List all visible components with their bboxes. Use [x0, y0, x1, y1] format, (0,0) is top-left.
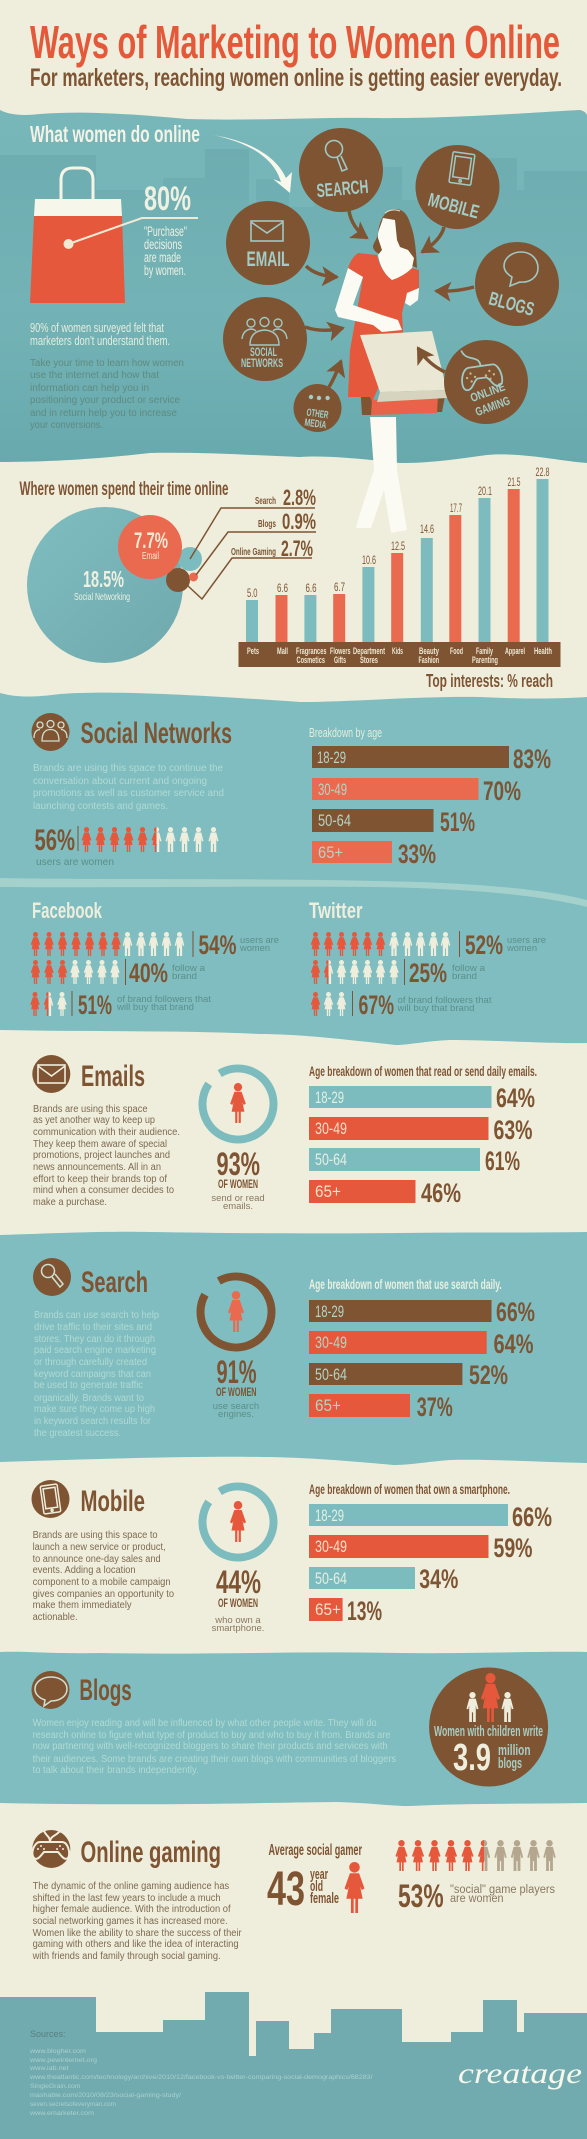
chart: age breakdown search: 66% [496, 1297, 535, 1327]
stat: average social gamer [267, 1842, 364, 1916]
text block: actionable. [33, 1612, 78, 1623]
heading: Blogs [79, 1674, 132, 1707]
icon: shopping bag [30, 168, 198, 303]
chart: bubble chart: Blogs [258, 518, 276, 530]
text: take your time: information can help you in [30, 383, 149, 394]
row: followers that will buy: of brand followers that [398, 995, 492, 1005]
text block: higher female audience. With the introduction of [33, 1904, 231, 1915]
text block [33, 1104, 180, 1208]
panel: social networks [0, 693, 587, 1045]
chart: age breakdown mobile: 30-49 [315, 1537, 347, 1556]
text block: Brands are using this space to [33, 1530, 158, 1541]
chart: bubble chart: 2.8% [283, 485, 316, 510]
stat: average social gamer: female [310, 1890, 339, 1907]
text block: now partnering with well-recognized bloggers to share their products and services with [33, 1741, 388, 1752]
chart: top interests bar chart: Beauty [419, 646, 439, 656]
chart: age breakdown mobile: 50-64 [315, 1569, 347, 1588]
bubble: other media [294, 384, 342, 432]
callout: women with children write: 3.9 [453, 1737, 491, 1779]
text block: the greatest success. [34, 1428, 121, 1439]
stat: 56% users are women: users are women [36, 856, 114, 868]
chart: bubble chart [27, 485, 316, 663]
icon: magnifier [326, 140, 347, 171]
text block: conversation about current and ongoing [33, 776, 207, 787]
wave band [0, 878, 587, 907]
stat: 44% of women: OF WOMEN [218, 1596, 258, 1610]
chart: top interests bar chart: Kids [392, 646, 403, 656]
text block: communication with their audience. [33, 1127, 180, 1138]
chart: age breakdown search: 18-29 [315, 1302, 344, 1321]
chart: top interests bar chart: Flowers [330, 646, 350, 656]
stat: 93% of women: OF WOMEN [218, 1177, 258, 1191]
chart: age breakdown emails: 46% [421, 1178, 461, 1208]
text block: launch a new service or product, [33, 1542, 166, 1553]
stat: 56% users are women: 56% [34, 824, 75, 857]
bubble: online gaming: GAMING [473, 394, 512, 419]
chart: top interests bar chart: 17.7 [450, 503, 462, 515]
stat: average social gamer: old [310, 1878, 323, 1895]
panel: online gaming [32, 1830, 556, 1962]
chart: breakdown by age: 18-29 [317, 748, 346, 767]
chart: top interests bar chart: 12.5 [391, 541, 405, 553]
chart: top interests bar chart: Department [353, 646, 385, 656]
row: follow a brand: 25% [409, 958, 447, 988]
heading: Online gaming [80, 1836, 221, 1869]
text block [33, 1530, 175, 1623]
chart: age breakdown search: 50-64 [315, 1365, 347, 1384]
skyline backdrop [0, 149, 587, 330]
text block [33, 1718, 396, 1776]
stat: 91% of women: engines. [218, 1409, 254, 1420]
text block: gaming with others and like the idea of interacting [33, 1939, 239, 1950]
text block: paid search engine marketing [34, 1345, 156, 1356]
bubble: blogs [475, 242, 559, 326]
text block: events. Adding a location [33, 1565, 136, 1576]
stat: 53% social game players: 53% [398, 1878, 444, 1914]
row: follow a brand [311, 958, 485, 988]
text block: Brands are using this space to continue the [33, 763, 223, 774]
row: followers that will buy [30, 990, 212, 1020]
bubble: other media: MEDIA [304, 417, 327, 432]
stat: 53% social game players [395, 1840, 556, 1914]
panel: twitter [309, 898, 546, 1020]
bubble: social networks [223, 297, 307, 381]
text: take your time [30, 358, 184, 431]
stat: 53% social game players: "social" game players [450, 1884, 555, 1896]
chart: top interests bar chart: Food [450, 646, 463, 656]
chart: top interests bar chart: 6.7 [334, 582, 345, 594]
text: 90% of women surveyed: 90% of women surveyed felt that [30, 320, 164, 335]
row: users are women: 52% [465, 930, 503, 960]
row: users are women: 54% [198, 930, 236, 960]
row: users are women [31, 930, 279, 960]
chart: breakdown by age: 33% [398, 839, 436, 869]
stat: 56% users are women [34, 824, 218, 868]
stat: 93% of women: send or read [211, 1193, 265, 1204]
chart: bubble chart: Social Networking [74, 591, 130, 603]
chart: age breakdown mobile: 18-29 [315, 1506, 344, 1525]
text block: Brands are using this space [33, 1104, 148, 1115]
heading: Emails [81, 1060, 145, 1093]
chart: top interests bar chart: Health [534, 646, 552, 656]
text block: gives companies an opportunity to [33, 1589, 175, 1600]
bubble: mobile [416, 145, 500, 229]
chart: top interests bar chart: Stores [360, 655, 378, 665]
heading: Social Networks [80, 717, 232, 750]
sources: www.pewinternet.org [29, 2057, 97, 2064]
stat: 80% purchase decisions: by women. [144, 263, 186, 278]
chart: breakdown by age: 83% [513, 744, 551, 774]
chart: age breakdown emails: 18-29 [315, 1088, 344, 1107]
row: users are women: women [239, 943, 270, 953]
stat: 91% of women: OF WOMEN [216, 1385, 256, 1399]
stat: 91% of women: use search [213, 1401, 259, 1412]
chart: top interests bar chart: 6.6 [277, 583, 288, 595]
icon: group of people [242, 318, 287, 345]
sources: Sources: [30, 2029, 66, 2039]
chart: bubble chart: Email [142, 551, 159, 562]
chart: top interests bar chart [238, 467, 560, 691]
text block: Women enjoy reading and will be influenced by what other people write. They will do [33, 1718, 377, 1729]
sources: seven.secretsofeveryman.com [30, 2101, 116, 2108]
chart: breakdown by age: 70% [483, 776, 521, 806]
chart: age breakdown mobile: 59% [494, 1533, 532, 1563]
chart: top interests bar chart: 14.6 [420, 524, 434, 536]
text block: keyword campaigns that can [34, 1369, 151, 1380]
chart: age breakdown mobile: 34% [419, 1564, 458, 1594]
row: follow a brand: brand [452, 971, 477, 981]
text block: to talk about their brands independently. [33, 1765, 199, 1776]
logo: creatage: creatage [458, 2057, 582, 2090]
bubble: blogs: BLOGS [486, 289, 536, 321]
chart: breakdown by age: 65+ [318, 843, 343, 862]
icon: magnifier [33, 1258, 71, 1296]
panel: where women spend their time online [20, 467, 560, 691]
text block: be used to generate traffic [34, 1380, 143, 1391]
text block: make a purchase. [33, 1197, 107, 1208]
sources: www.blogher.com [29, 2048, 86, 2055]
chart: age breakdown search: 52% [469, 1360, 508, 1390]
text block: Women like the ability to share the success of their [33, 1928, 242, 1939]
chart: top interests bar chart: Parenting [472, 655, 498, 665]
chart: breakdown by age: 50-64 [318, 811, 351, 830]
chart: age breakdown emails: 50-64 [315, 1150, 347, 1169]
text block: social networking games it has increased more. [33, 1916, 228, 1927]
bubble: social networks: NETWORKS [241, 356, 283, 370]
panel: facebook [30, 898, 279, 1020]
chart: age breakdown search: 37% [417, 1392, 453, 1422]
bubble: mobile: MOBILE [426, 190, 481, 224]
text block: stores. They can do it through [34, 1334, 155, 1345]
row: follow a brand [31, 958, 205, 988]
text block: make sure they come up high [34, 1404, 155, 1415]
row: followers that will buy: will buy that brand [116, 1002, 194, 1012]
stat: 44% of women [189, 1473, 287, 1634]
chart: age breakdown emails: 30-49 [315, 1119, 347, 1138]
chart: top interests bar chart: 22.8 [536, 467, 550, 479]
stat: average social gamer: Average social gamer [268, 1842, 362, 1859]
panel: twitter: Twitter [309, 898, 363, 923]
icon: social networks [32, 713, 70, 751]
panel: what women do online [0, 110, 587, 463]
row: followers that will buy: 67% [358, 990, 394, 1020]
bubble: search [299, 128, 383, 212]
chart: top interests bar chart: Fragrances [296, 646, 326, 656]
callout: women with children write: blogs [498, 1755, 522, 1772]
stat: 91% of women: 91% [216, 1354, 256, 1390]
chart: age breakdown mobile: 13% [347, 1596, 382, 1626]
row: followers that will buy [311, 990, 492, 1020]
panel: mobile [32, 1473, 552, 1634]
bubble: online gaming: ONLINE [468, 380, 507, 405]
chart: top interests bar chart: 6.6 [306, 583, 316, 595]
chart: age breakdown search: 65+ [315, 1396, 341, 1415]
chart: age breakdown mobile: 65+ [315, 1600, 341, 1619]
text block: to announce one-day sales and [33, 1554, 161, 1565]
bubble: social networks: SOCIAL [250, 345, 277, 359]
text block: or through carefully created [34, 1357, 147, 1368]
panel: blogs [0, 1652, 587, 1806]
chart: top interests bar chart: Fashion [418, 655, 439, 665]
text block [32, 1881, 242, 1962]
chart: breakdown by age: 30-49 [318, 780, 347, 799]
stat: 93% of women [189, 1055, 287, 1212]
heading: Mobile [80, 1485, 145, 1518]
chart: top interests bar chart: 20.1 [478, 486, 492, 498]
row: followers that will buy: will buy that brand [396, 1003, 474, 1013]
bubble: email [226, 201, 310, 285]
chart: top interests bar chart: Apparel [505, 646, 525, 656]
callout: women with children write [429, 1668, 548, 1786]
stat: 80% purchase decisions [144, 180, 191, 278]
bubble: search: SEARCH [316, 177, 369, 202]
chart: top interests bar chart: Pets [247, 646, 259, 656]
figure: woman with shopping bags [335, 209, 447, 533]
chart: top interests bar chart: Family [476, 646, 493, 656]
heading: Where women spend their time online [20, 479, 228, 500]
text block: The dynamic of the online gaming audience has [33, 1881, 229, 1892]
chart: age breakdown emails [309, 1063, 537, 1208]
sources: www.iab.net [29, 2065, 69, 2072]
chart: bubble chart: 2.7% [281, 536, 313, 561]
icon: envelope [32, 1055, 70, 1093]
chart: age breakdown mobile [309, 1481, 552, 1626]
chart: bubble chart: 7.7% [134, 528, 168, 553]
arrow: heading to figure [213, 135, 292, 193]
text block: promotions, project launches and [33, 1150, 170, 1161]
text block: launching contests and games. [33, 801, 168, 812]
icon: speech bubble [504, 252, 538, 286]
text: 90% of women surveyed: marketers don't understand them. [30, 333, 170, 348]
chart: top interests bar chart: Cosmetics [296, 655, 325, 665]
row: follow a brand: 40% [129, 958, 168, 988]
row: followers that will buy: of brand followers that [117, 994, 212, 1004]
sources: www.emarketer.com [29, 2110, 94, 2117]
text: take your time: use the internet and how that [30, 370, 159, 381]
text: 90% of women surveyed [30, 320, 170, 348]
text block: with friends and family through social gaming. [32, 1951, 221, 1962]
text block: as yet another way to keep up [33, 1115, 155, 1126]
stat: 44% of women: smartphone. [212, 1623, 264, 1634]
text block: Brands can use search to help [34, 1310, 159, 1321]
row: follow a brand: follow a [452, 963, 485, 973]
chart: top interests bar chart: 5.0 [247, 588, 258, 600]
stat: 80% purchase decisions: "Purchase" [144, 224, 187, 239]
bubble: email: EMAIL [246, 248, 290, 271]
heading: Search [81, 1266, 148, 1299]
chart: age breakdown search: 30-49 [315, 1333, 347, 1352]
callout: women with children write: million [498, 1742, 530, 1759]
sources: www.theatlantic.com/technology/archive/2010/12/facebook-vs-twitter-comparing-social-demographics/68283/ [29, 2074, 373, 2081]
text: take your time: and in return help you to increase [30, 408, 177, 419]
text block: component to a mobile campaign [33, 1577, 171, 1588]
chart: top interests bar chart: 21.5 [508, 477, 520, 489]
chart: top interests bar chart: Gifts [334, 655, 346, 665]
stat: 93% of women: emails. [223, 1201, 253, 1212]
icon: game controller [458, 345, 503, 391]
chart: age breakdown emails: 63% [494, 1115, 532, 1145]
text block [33, 763, 224, 812]
text block: effort to keep their brands top of [33, 1174, 167, 1185]
chart: age breakdown emails: 65+ [315, 1182, 341, 1201]
text: take your time: your conversions. [30, 420, 103, 431]
panel: search [0, 1232, 587, 1465]
chart: age breakdown emails: 61% [485, 1146, 520, 1176]
chart: bubble chart: 18.5% [83, 566, 124, 592]
stat: 93% of women: 93% [216, 1146, 260, 1182]
row: users are women: women [506, 943, 537, 953]
chart: top interests bar chart: Mall [277, 646, 288, 656]
stat: 44% of women: 44% [216, 1564, 261, 1600]
text: take your time: Take your time to learn how women [30, 358, 184, 369]
text: take your time: positioning your product or service [30, 395, 180, 406]
text block [34, 1310, 159, 1439]
row: users are women [311, 930, 546, 960]
icon: envelope [251, 221, 283, 241]
chart: breakdown by age [309, 725, 551, 869]
text block: news announcements. All in an [33, 1162, 161, 1173]
text block: make them immediately [33, 1600, 132, 1611]
row: follow a brand: brand [172, 971, 197, 981]
bubble: other media: OTHER [306, 407, 329, 422]
chart: bubble chart: Online Gaming [231, 546, 276, 558]
arrows to figure [305, 211, 474, 387]
chart: age breakdown emails: 64% [496, 1083, 535, 1113]
icon: phone [32, 1480, 70, 1518]
panel: emails [32, 1055, 537, 1212]
heading: what women do online: What women do online [30, 121, 200, 147]
chart: breakdown by age: Breakdown by age [309, 725, 382, 740]
chart: top interests bar chart: 10.6 [362, 555, 376, 567]
text block: their audiences. Some brands are creating their own blogs with communities of bloggers [33, 1754, 396, 1765]
stat: 91% of women [188, 1264, 284, 1420]
panel: facebook: Facebook [32, 898, 103, 923]
icon: speech bubble [32, 1671, 70, 1709]
sources [29, 2029, 373, 2117]
chart: age breakdown mobile: 66% [512, 1502, 552, 1532]
stat: 44% of women: who own a [214, 1615, 261, 1626]
text block: organically. Brands want to [34, 1393, 144, 1404]
sources: mashable.com/2010/08/23/social-gaming-study/ [30, 2092, 181, 2099]
chart: age breakdown search: 64% [494, 1329, 534, 1359]
stat: average social gamer: year [310, 1866, 328, 1883]
row: users are women: users are [240, 935, 279, 945]
text block: research online to figure what type of product to buy and who to buy it from. Brands are [33, 1730, 391, 1741]
sources: SingleGrain.com [30, 2083, 80, 2090]
row: followers that will buy: 51% [78, 990, 112, 1020]
bubble: online gaming [444, 340, 528, 424]
stat: 80% purchase decisions: 80% [144, 180, 191, 218]
stat: 80% purchase decisions: are made [144, 250, 181, 265]
chart: age breakdown search [309, 1276, 535, 1422]
text block: They keep them aware of special [33, 1139, 167, 1150]
text block: promotions as well as customer service and [33, 788, 224, 799]
row: users are women: users are [507, 935, 546, 945]
stat: 80% purchase decisions: decisions [144, 237, 182, 252]
icon: game controller [32, 1830, 70, 1868]
text block: drive traffic to their sites and [34, 1322, 152, 1333]
stat: 53% social game players: are women [450, 1893, 504, 1905]
chart: breakdown by age: 51% [440, 807, 475, 837]
chart: bubble chart: Search [255, 495, 276, 507]
stat: average social gamer: 43 [267, 1863, 305, 1916]
icon: phone [449, 152, 475, 185]
text block: mind when a consumer decides to [33, 1185, 174, 1196]
panel: footer skyline [0, 1992, 587, 2139]
row: follow a brand: follow a [172, 963, 205, 973]
chart: bubble chart: 0.9% [282, 509, 316, 534]
text block: shifted in the last few years to include a much [33, 1893, 221, 1904]
text block: in keyword search results for [34, 1416, 152, 1427]
